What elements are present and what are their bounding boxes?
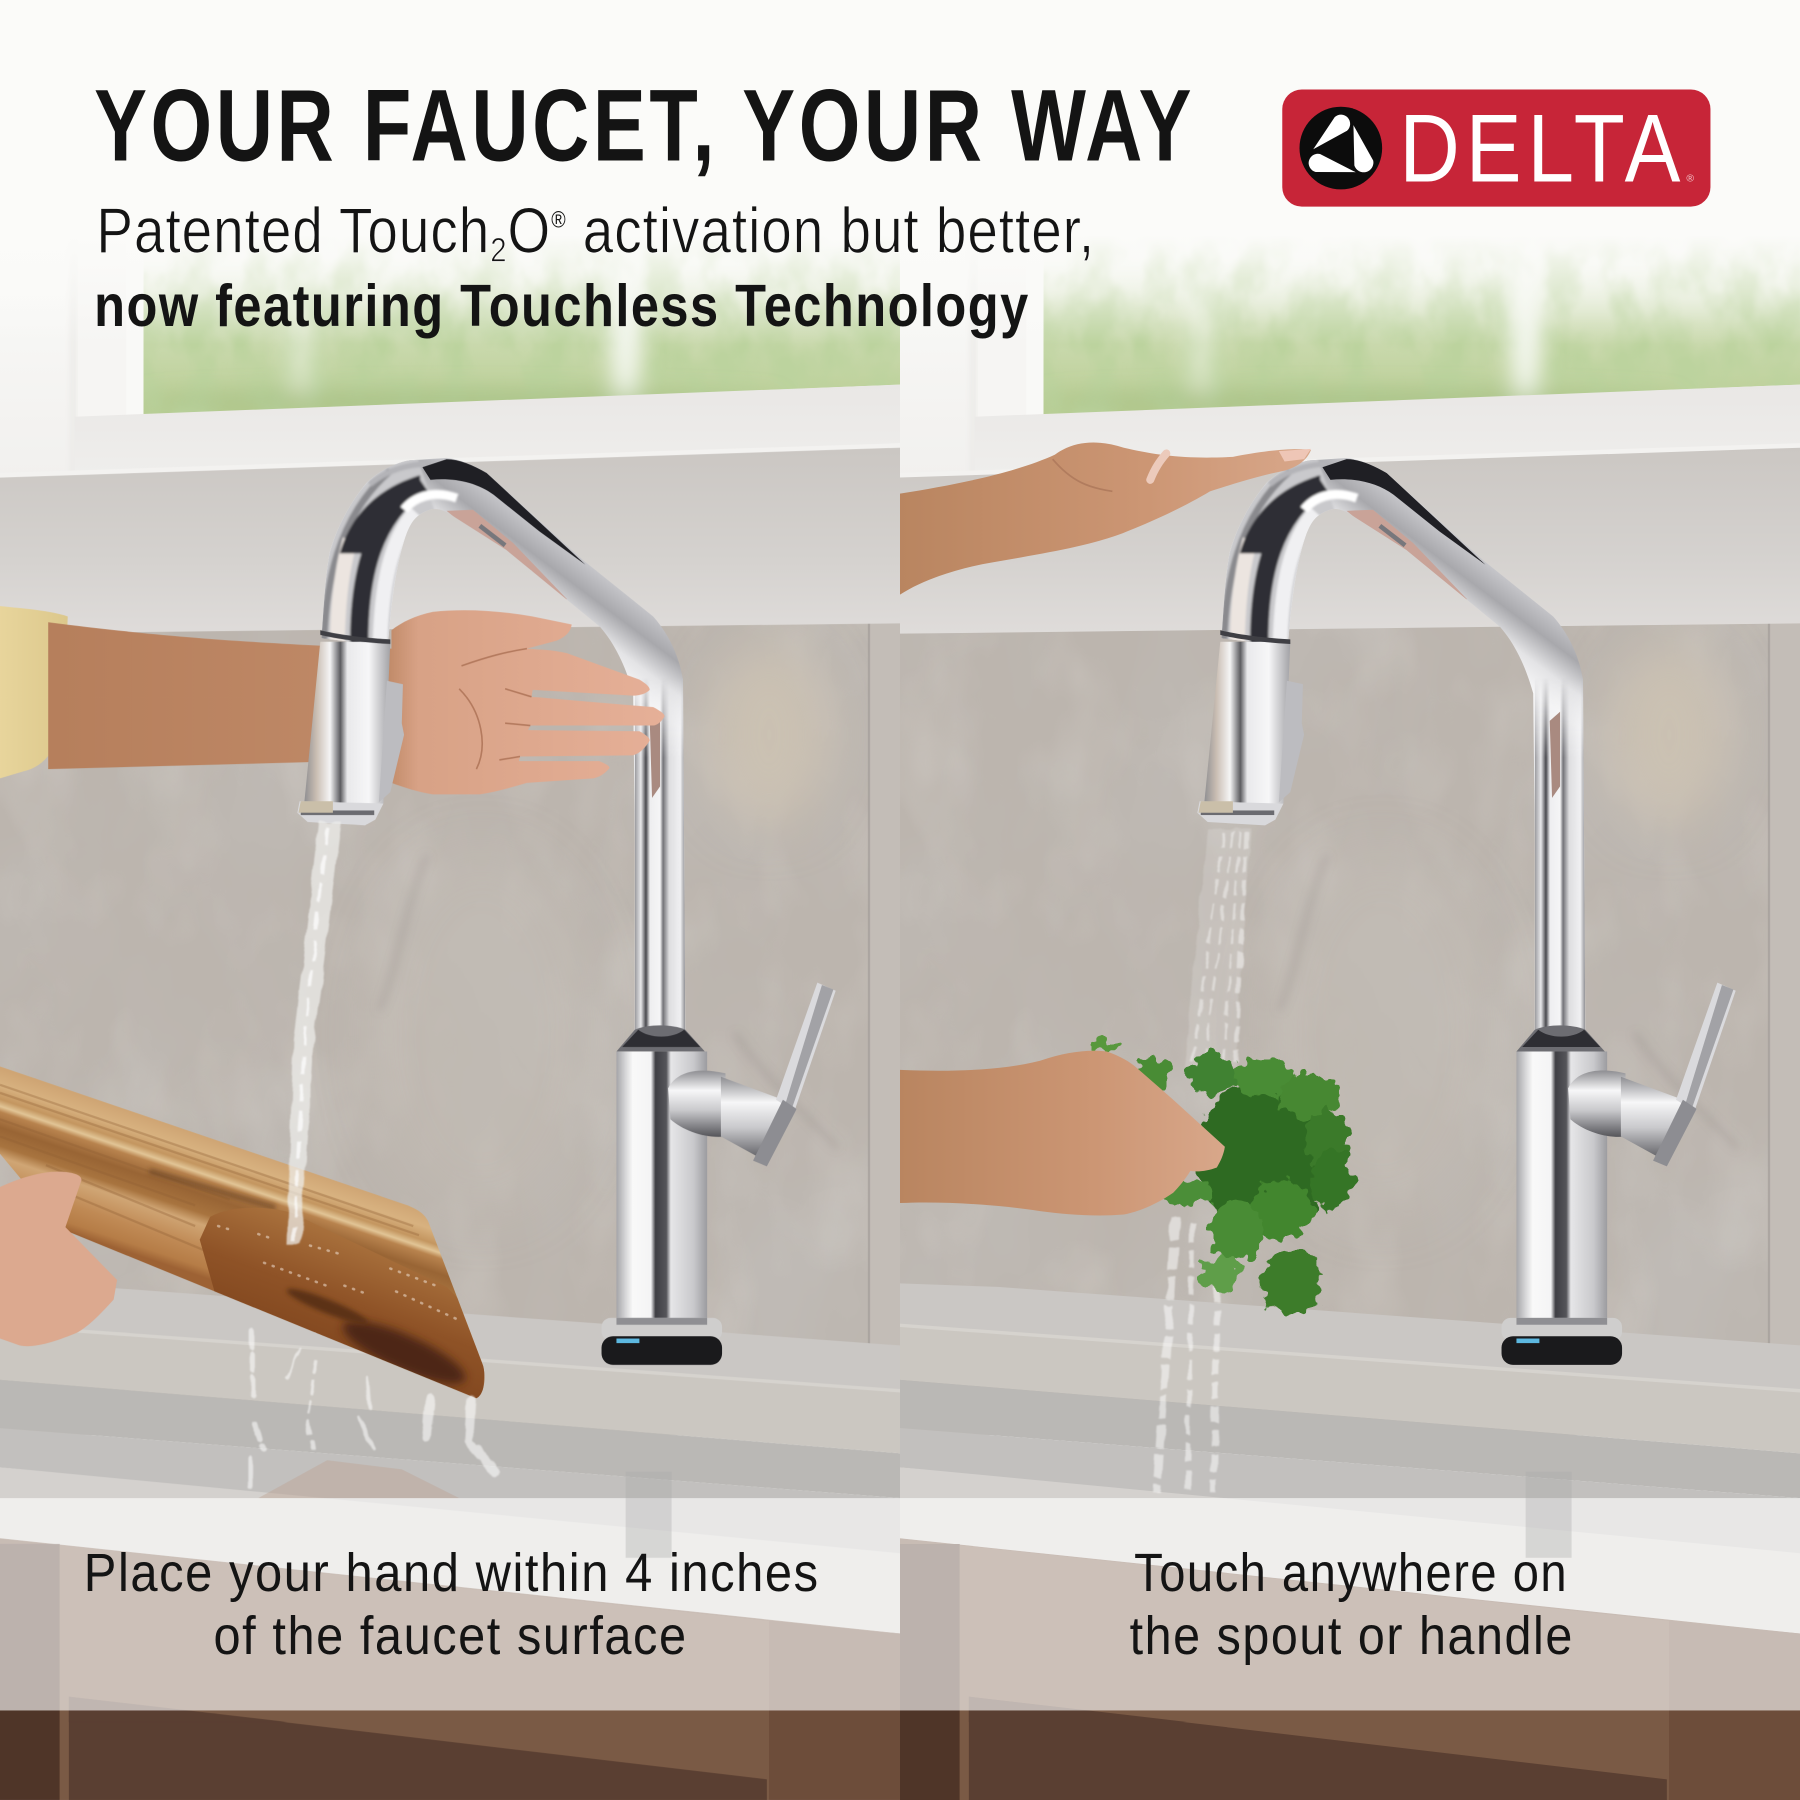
Delta logo bbox=[1282, 90, 1710, 207]
subtitle line two: now featuring Touchless Technology bbox=[94, 272, 1030, 339]
cilantro bunch bbox=[1091, 1040, 1353, 1313]
right caption line one: Touch anywhere on bbox=[1134, 1543, 1568, 1603]
left caption line one: Place your hand within 4 inches bbox=[84, 1543, 820, 1603]
left caption line two: of the faucet surface bbox=[214, 1606, 688, 1666]
right caption line two: the spout or handle bbox=[1130, 1606, 1574, 1666]
subtitle line one: Patented Touch bbox=[96, 195, 558, 267]
wet area of the board bbox=[200, 1208, 484, 1406]
faucet head, right bbox=[1197, 630, 1304, 825]
water spray, right bbox=[1157, 829, 1251, 1492]
subtitle line one: ® bbox=[551, 206, 567, 232]
subtitle line one: 2 bbox=[490, 232, 508, 270]
logo emblem bbox=[1299, 107, 1382, 189]
water stream, left bbox=[287, 822, 341, 1243]
registered mark: ® bbox=[1686, 173, 1694, 184]
faucet body, right bbox=[1221, 458, 1736, 1365]
left caption bbox=[84, 1543, 820, 1666]
kitchen background, right bbox=[900, 246, 1800, 1800]
subtitle line one: activation but better, bbox=[567, 195, 1095, 267]
right caption bbox=[1130, 1543, 1574, 1666]
hand and arm hovering near faucet bbox=[48, 610, 665, 794]
faucet head, left bbox=[297, 630, 404, 825]
title: YOUR FAUCET, YOUR WAY bbox=[94, 69, 1195, 183]
board reflection in sink bbox=[258, 1460, 459, 1498]
logo wordmark: DELTA bbox=[1399, 95, 1686, 202]
kitchen background, left bbox=[0, 246, 900, 1800]
faucet body, left bbox=[321, 458, 836, 1365]
hand touching the spout bbox=[900, 443, 1311, 595]
cutting board bbox=[0, 1066, 484, 1406]
yellow sleeve bbox=[0, 606, 68, 778]
water drips from board bbox=[250, 1332, 496, 1487]
subtitle line one: O bbox=[508, 195, 551, 267]
hand holding board bbox=[0, 1172, 117, 1346]
panel: right scene, hand touching faucet bbox=[900, 246, 1800, 1800]
hand holding cilantro bbox=[900, 1051, 1225, 1215]
panel: left scene, hand near faucet bbox=[0, 246, 900, 1800]
